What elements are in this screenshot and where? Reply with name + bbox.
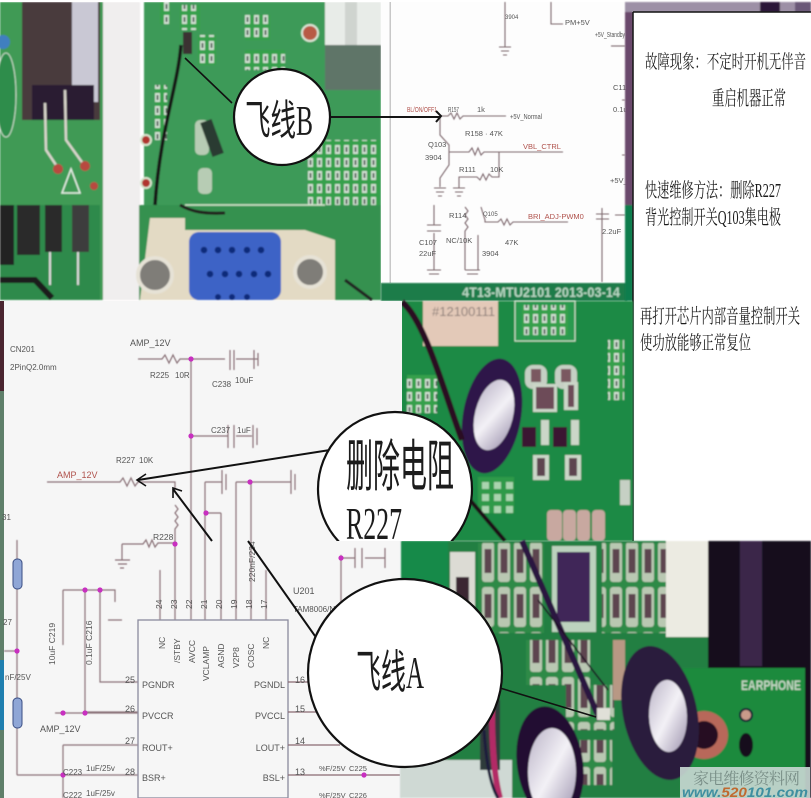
arrow: callout A to schematic xyxy=(248,541,315,636)
schematic labels: 10uF xyxy=(235,376,253,385)
schematic labels: CN201 xyxy=(10,345,35,354)
schematic labels: R114 xyxy=(449,211,466,220)
schematic labels: R228 xyxy=(153,532,174,542)
schematic labels xyxy=(2,338,367,798)
callout: 飞线A xyxy=(308,579,502,767)
schematic labels: 10uF C219 xyxy=(47,623,57,665)
schematic labels: 27 xyxy=(125,736,135,746)
photo strip: below the top schematic xyxy=(381,283,627,301)
schematic labels: R157 xyxy=(448,105,459,114)
schematic labels: COSC xyxy=(246,643,256,668)
schematic labels: 10K xyxy=(139,456,154,465)
arrow: callout B to wire point xyxy=(185,58,232,103)
schematic labels: 21 xyxy=(199,599,209,609)
arrow: callout A to board solder point xyxy=(500,688,596,717)
schematic traces xyxy=(427,2,625,282)
panel: fault description text xyxy=(633,12,811,541)
schematic labels: %F/25V xyxy=(319,764,346,773)
schematic labels: AMP_12V xyxy=(130,338,171,348)
photo: middle-right circuit board with capacitor xyxy=(401,301,633,541)
schematic labels: 28 xyxy=(125,767,135,777)
schematic labels xyxy=(407,15,633,258)
schematic labels: C225 xyxy=(349,764,367,773)
schematic labels: R227 xyxy=(116,456,136,465)
schematic labels: 22 xyxy=(184,599,194,609)
schematic labels: 3904 xyxy=(425,153,442,162)
schematic labels: BL/ON/OFF1 xyxy=(407,105,437,114)
photo strip: below the top schematic: 4T13-MTU2101 2013-03-14 xyxy=(462,284,620,300)
schematic labels: 24 xyxy=(154,599,164,609)
arrow: wire A to schematic pin xyxy=(173,488,212,541)
schematic labels: 2PinQ2.0mm xyxy=(10,363,57,372)
schematic labels: 1uF/25v xyxy=(86,789,115,798)
schematic labels: 2.2uF xyxy=(602,227,622,236)
callout: 删除电阻 R227: 删除电阻 xyxy=(346,435,454,498)
schematic labels: AGND xyxy=(216,643,226,668)
schematic labels: 18 xyxy=(244,599,254,609)
schematic labels: VCLAMP xyxy=(201,646,211,681)
schematic labels: NC xyxy=(261,637,271,649)
schematic labels: 22uF xyxy=(419,249,437,258)
schematic labels: 23 xyxy=(169,599,179,609)
callout: 飞线B xyxy=(234,69,330,165)
schematic labels: 17 xyxy=(259,599,269,609)
schematic labels: Q105 xyxy=(483,212,498,218)
watermark: site logo xyxy=(680,767,810,798)
schematic labels: BSR+ xyxy=(142,773,166,783)
schematic traces xyxy=(4,350,385,798)
schematic labels: 1k xyxy=(477,105,485,114)
IC pin names (right): PGNDL xyxy=(254,680,285,690)
photo: middle-right circuit board with capacitor: #12100111 xyxy=(432,304,495,319)
schematic labels: 19 xyxy=(229,599,239,609)
schematic labels: BRI_ADJ-PWM0 xyxy=(528,212,584,221)
schematic labels: +5V_Normal xyxy=(510,112,542,121)
schematic: bottom-left audio amplifier circuit xyxy=(0,301,402,798)
schematic labels: PVCCR xyxy=(142,711,174,721)
schematic labels: 31 xyxy=(2,513,11,522)
callout: 删除电阻 R227: R227 xyxy=(346,498,402,549)
schematic labels: 15 xyxy=(295,704,305,714)
schematic labels: PM+5V xyxy=(565,18,590,27)
schematic labels: 0.1uF C216 xyxy=(84,620,94,665)
icon: ferrite beads xyxy=(13,559,22,728)
callout: 删除电阻 R227 xyxy=(316,410,474,541)
schematic labels: 26 xyxy=(125,704,135,714)
text: amplifier reset: 使功放能够正常复位 xyxy=(640,332,751,354)
schematic labels: BSL+ xyxy=(263,773,285,783)
schematic: top, backlight control circuit xyxy=(381,2,633,283)
schematic labels: 47K xyxy=(505,238,518,247)
schematic labels: 3904 xyxy=(482,249,499,258)
band at the very top xyxy=(0,0,625,2)
schematic labels: C107 xyxy=(419,238,437,247)
schematic labels: R111 xyxy=(459,165,476,174)
schematic labels: VBL_CTRL xyxy=(523,142,561,151)
schematic labels: C238 xyxy=(212,380,232,389)
schematic labels: Q103 xyxy=(428,140,446,149)
photo: bottom-right circuit board with IC and capacitors xyxy=(400,541,811,798)
schematic labels: 1uF xyxy=(237,426,251,435)
arrow: callout B to BL_ON_OFF line xyxy=(329,111,441,122)
schematic labels: nF/25V xyxy=(5,673,31,682)
schematic labels: 0.1uF xyxy=(613,105,633,114)
schematic labels: PVCCL xyxy=(255,711,285,721)
schematic labels: 14 xyxy=(295,736,305,746)
schematic labels: R225 xyxy=(150,371,170,380)
schematic labels: ROUT+ xyxy=(142,743,173,753)
schematic labels: 10R xyxy=(175,371,190,380)
schematic labels: C223 xyxy=(63,768,83,777)
schematic labels: 1uF/25v xyxy=(86,764,115,773)
callout: 飞线A: 飞线A xyxy=(356,647,424,698)
IC pin names (left): PGNDR xyxy=(142,680,175,690)
schematic junction dots xyxy=(14,356,367,778)
schematic labels: /STBY xyxy=(172,638,182,663)
watermark: site logo: 家电维修资料网 xyxy=(693,770,800,788)
photo strip: behind the text panel xyxy=(625,2,811,301)
rotated top pin names: NC xyxy=(157,637,167,649)
schematic IC block xyxy=(138,620,288,798)
schematic labels: 3904 xyxy=(505,15,519,21)
schematic labels: +5V_I xyxy=(610,176,630,185)
schematic labels: U201 xyxy=(293,586,315,596)
schematic labels: C114 xyxy=(613,83,630,92)
schematic labels: NC/10K xyxy=(446,236,472,245)
schematic labels: 10K xyxy=(490,165,503,174)
schematic labels: +5V_Standby xyxy=(595,30,625,39)
arrow: callout to R227 xyxy=(137,450,330,486)
schematic labels: TAM8006/NC xyxy=(293,605,341,614)
schematic labels: 220nF/234 xyxy=(247,541,257,582)
schematic labels: 27 xyxy=(3,618,12,627)
callout: 飞线B: 飞线B xyxy=(245,99,313,145)
schematic labels: 20 xyxy=(214,599,224,609)
schematic labels: AVCC xyxy=(187,640,197,663)
pin numbers: 25 xyxy=(125,675,135,685)
schematic labels: V2P8 xyxy=(231,647,241,668)
schematic labels: R158 · 47K xyxy=(465,129,503,138)
schematic labels: C237 xyxy=(211,426,231,435)
schematic labels: 13 xyxy=(295,767,305,777)
schematic labels: AMP_12V xyxy=(57,470,98,480)
schematic labels: 16 xyxy=(295,675,305,685)
schematic labels: AMP_12V xyxy=(40,724,81,734)
schematic labels: LOUT+ xyxy=(256,743,285,753)
photo: top-left circuit board with capacitor and VGA connector xyxy=(0,2,381,300)
